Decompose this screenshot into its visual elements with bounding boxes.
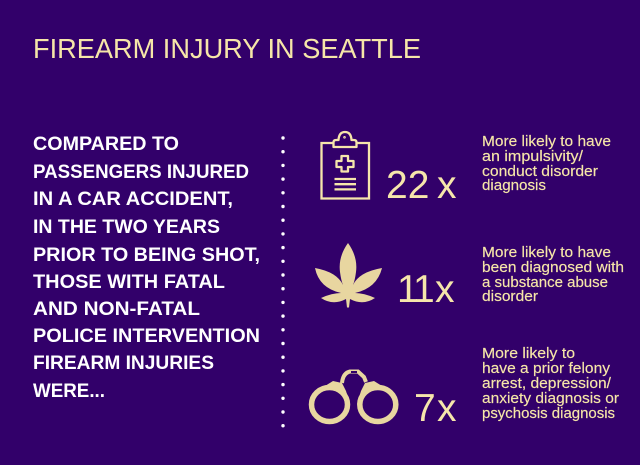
text block: comparison statement bbox=[33, 133, 260, 402]
text block: comparison statement: FIREARM INJURIES bbox=[33, 352, 214, 374]
text: 22x description bbox=[482, 134, 611, 194]
text: 22x description: diagnosis bbox=[482, 178, 546, 194]
stat: 11x: 1 bbox=[413, 268, 435, 311]
stat: 22x: x bbox=[437, 164, 457, 207]
text block: comparison statement: IN A CAR ACCIDENT, bbox=[33, 188, 233, 210]
stat: 11x bbox=[397, 268, 455, 311]
stat: 22x bbox=[386, 164, 457, 207]
text: 7x description: arrest, depression/ bbox=[482, 376, 611, 392]
text: 7x description: More likely to bbox=[482, 346, 575, 362]
text: 11x description bbox=[482, 245, 624, 305]
text block: comparison statement: POLICE INTERVENTION bbox=[33, 325, 260, 347]
stat: 11x: x bbox=[435, 268, 455, 311]
text: 7x description: have a prior felony bbox=[482, 361, 611, 377]
stat: 7x: x bbox=[437, 387, 457, 430]
text: 22x description: conduct disorder bbox=[482, 164, 598, 180]
text: 11x description: been diagnosed with bbox=[482, 260, 624, 276]
text: 7x description: anxiety diagnosis or bbox=[482, 391, 619, 407]
text: 7x description: psychosis diagnosis bbox=[482, 406, 615, 422]
icon: cannabis leaf bbox=[315, 243, 382, 308]
text block: comparison statement: COMPARED TO bbox=[33, 133, 179, 155]
icon: handcuffs bbox=[312, 371, 396, 422]
text: 11x description: disorder bbox=[482, 289, 538, 305]
stat: 11x: 1 bbox=[397, 268, 419, 311]
title: FIREARM INJURY IN SEATTLE bbox=[33, 33, 421, 64]
text: 22x description: More likely to have bbox=[482, 134, 611, 150]
icon: clipboard bbox=[322, 132, 369, 198]
text block: comparison statement: PASSENGERS INJURED bbox=[33, 161, 249, 183]
text block: comparison statement: WERE... bbox=[33, 380, 105, 402]
text block: comparison statement: PRIOR TO BEING SHOT, bbox=[33, 244, 260, 266]
text block: comparison statement: AND NON-FATAL bbox=[33, 298, 200, 320]
text: 7x description bbox=[482, 346, 619, 422]
text: 11x description: a substance abuse bbox=[482, 275, 608, 291]
text: 22x description: an impulsivity/ bbox=[482, 149, 583, 165]
text block: comparison statement: THOSE WITH FATAL bbox=[33, 271, 225, 293]
text: 11x description: More likely to have bbox=[482, 245, 611, 261]
stat: 22x: 22 bbox=[386, 164, 429, 207]
stat: 7x bbox=[414, 387, 457, 430]
stat: 7x: 7 bbox=[414, 387, 436, 430]
text block: comparison statement: IN THE TWO YEARS bbox=[33, 216, 220, 238]
